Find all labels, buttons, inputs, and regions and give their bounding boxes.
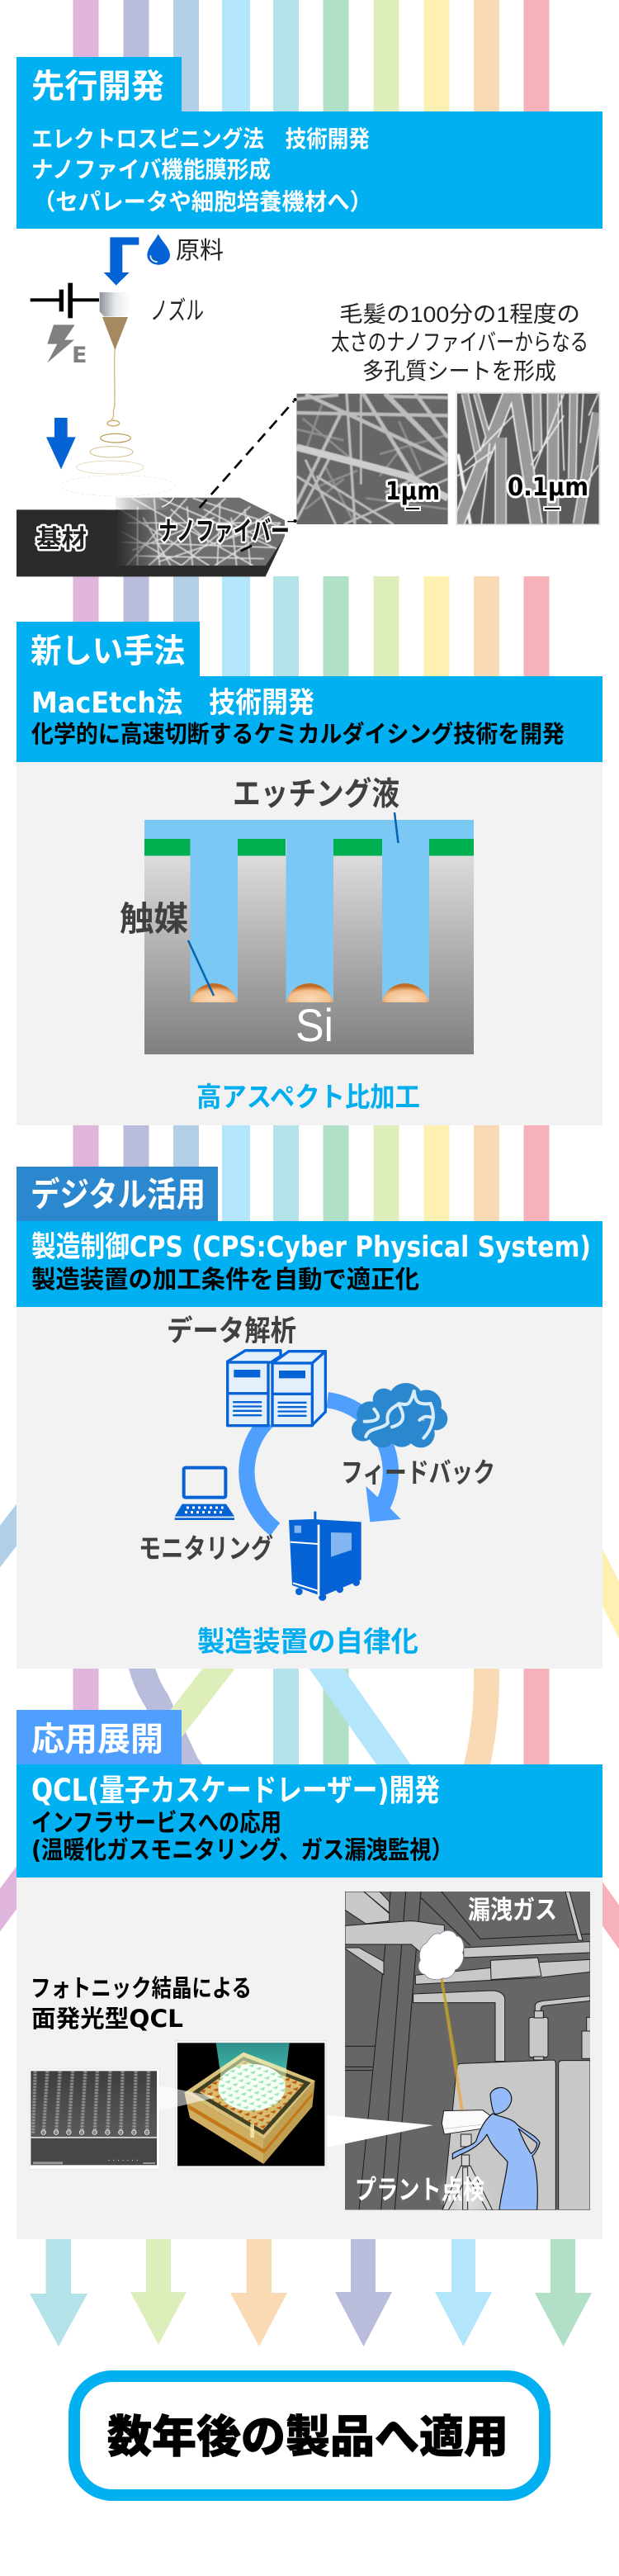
panel background (17, 1878, 602, 2239)
header: CPS (17, 1221, 602, 1307)
gas cloud (418, 1930, 464, 1980)
spiral fiber (61, 348, 176, 496)
micrograph: 1 micrometer (294, 394, 448, 524)
person (452, 2088, 540, 2210)
icon: machine (289, 1512, 361, 1601)
connector: micrograph to chip (159, 2086, 217, 2111)
light cone: device callout (327, 2115, 433, 2147)
tab: application (17, 1710, 182, 1765)
label: photonic crystal QCL (31, 1974, 252, 2033)
mask layer (144, 839, 474, 855)
label: photonic crystal QCL: 面発光型QCL (31, 2005, 183, 2033)
diagram: electrospinning apparatus (17, 234, 601, 576)
micrograph: 1 micrometer: 1μm (385, 477, 440, 506)
icon: servers (228, 1351, 325, 1426)
label: Si: Si (295, 999, 333, 1051)
micrograph: 0.1 micrometer: 0.1μm (508, 473, 588, 502)
substrate with nanofiber (17, 494, 286, 576)
callout: applied to products in a few years: 数年後の製品へ適用 (107, 2411, 508, 2463)
arrow: feed (104, 237, 139, 286)
micrograph: photonic crystal (29, 2069, 160, 2169)
diagram: CPS loop (139, 1314, 495, 1601)
label: catalyst (120, 899, 214, 996)
header: QCL: QCL(量子カスケードレーザー)開発 (31, 1773, 440, 1808)
label: feedback: フィードバック (341, 1456, 495, 1489)
caption: autonomous equipment: 製造装置の自律化 (197, 1626, 418, 1659)
voltage symbol (31, 283, 99, 318)
header: electrospinning: エレクトロスピニング法 技術開発 (31, 125, 370, 153)
label: etchant (233, 776, 399, 843)
icon: brain (352, 1383, 447, 1447)
label: plant inspection: プラント点検 (355, 2174, 484, 2205)
panel: new method (17, 622, 602, 1125)
arrow: monitoring arc (247, 1422, 275, 1529)
arrow: deposition (46, 418, 76, 469)
header: MacEtch (17, 676, 602, 762)
tab: advance development: 先行開発 (31, 68, 164, 106)
header: QCL: インフラサービスへの応用 (31, 1809, 281, 1838)
header: MacEtch: MacEtch法 技術開発 (31, 687, 314, 720)
arrow: feedback arc (328, 1400, 401, 1522)
panel: advance development (17, 57, 602, 576)
text: description: 毛髪の100分の1程度の (339, 302, 580, 327)
callout: applied to products in a few years (74, 2376, 545, 2495)
label: data analysis: データ解析 (167, 1314, 296, 1348)
tab: digital use (17, 1167, 218, 1222)
tab: digital use: デジタル活用 (31, 1175, 206, 1215)
header: CPS: 製造装置の加工条件を自動で適正化 (31, 1266, 419, 1295)
header: electrospinning (17, 111, 602, 229)
header: electrospinning: （セパレータや細胞培養機材へ） (33, 188, 372, 215)
label: leak gas: 漏洩ガス (468, 1896, 557, 1925)
header: QCL: (温暖化ガスモニタリング、ガス漏洩監視） (31, 1836, 453, 1865)
panel background (17, 229, 602, 576)
label: nozzle: ノズル (150, 296, 204, 325)
arrows: towards products (30, 2239, 592, 2346)
icon: laptop (175, 1468, 234, 1520)
label: photonic crystal QCL: フォトニック結晶による (31, 1974, 252, 2002)
tab: application: 応用展開 (31, 1721, 163, 1759)
zoom guide lines (200, 401, 295, 551)
label: etchant: エッチング液 (233, 776, 399, 813)
panel: application (17, 1710, 602, 2239)
label: nanofiber: ナノファイバー (158, 515, 290, 547)
panel background (17, 1307, 602, 1669)
illustration: QCL chip (176, 2041, 327, 2169)
catalyst domes (191, 983, 429, 1002)
header: electrospinning: ナノファイバ機能膜形成 (31, 156, 271, 183)
tab: new method (17, 622, 200, 677)
nozzle (100, 292, 130, 350)
header: MacEtch: 化学的に高速切断するケミカルダイシング技術を開発 (31, 720, 565, 748)
illustration: plant inspection (345, 1892, 592, 2219)
label: catalyst: 触媒 (120, 899, 188, 939)
micrograph: 0.1 micrometer (456, 392, 601, 525)
icon: drop (147, 234, 170, 265)
tab: advance development (17, 57, 182, 112)
icon: electric field (47, 324, 87, 368)
caption: high aspect ratio: 高アスペクト比加工 (196, 1081, 420, 1113)
label: substrate: 基材 (36, 525, 87, 554)
header: QCL (17, 1764, 602, 1878)
panel background (17, 762, 602, 1125)
label: raw material: 原料 (176, 237, 224, 264)
tab: new method: 新しい手法 (31, 632, 185, 670)
text: description (331, 302, 588, 384)
text: description: 多孔質シートを形成 (362, 358, 556, 384)
icon: electric field: E (72, 343, 87, 368)
label: monitoring: モニタリング (139, 1532, 273, 1565)
panel: digital use (17, 1167, 602, 1669)
trenches (190, 839, 429, 1002)
diagram: etching cross section (120, 776, 474, 1054)
